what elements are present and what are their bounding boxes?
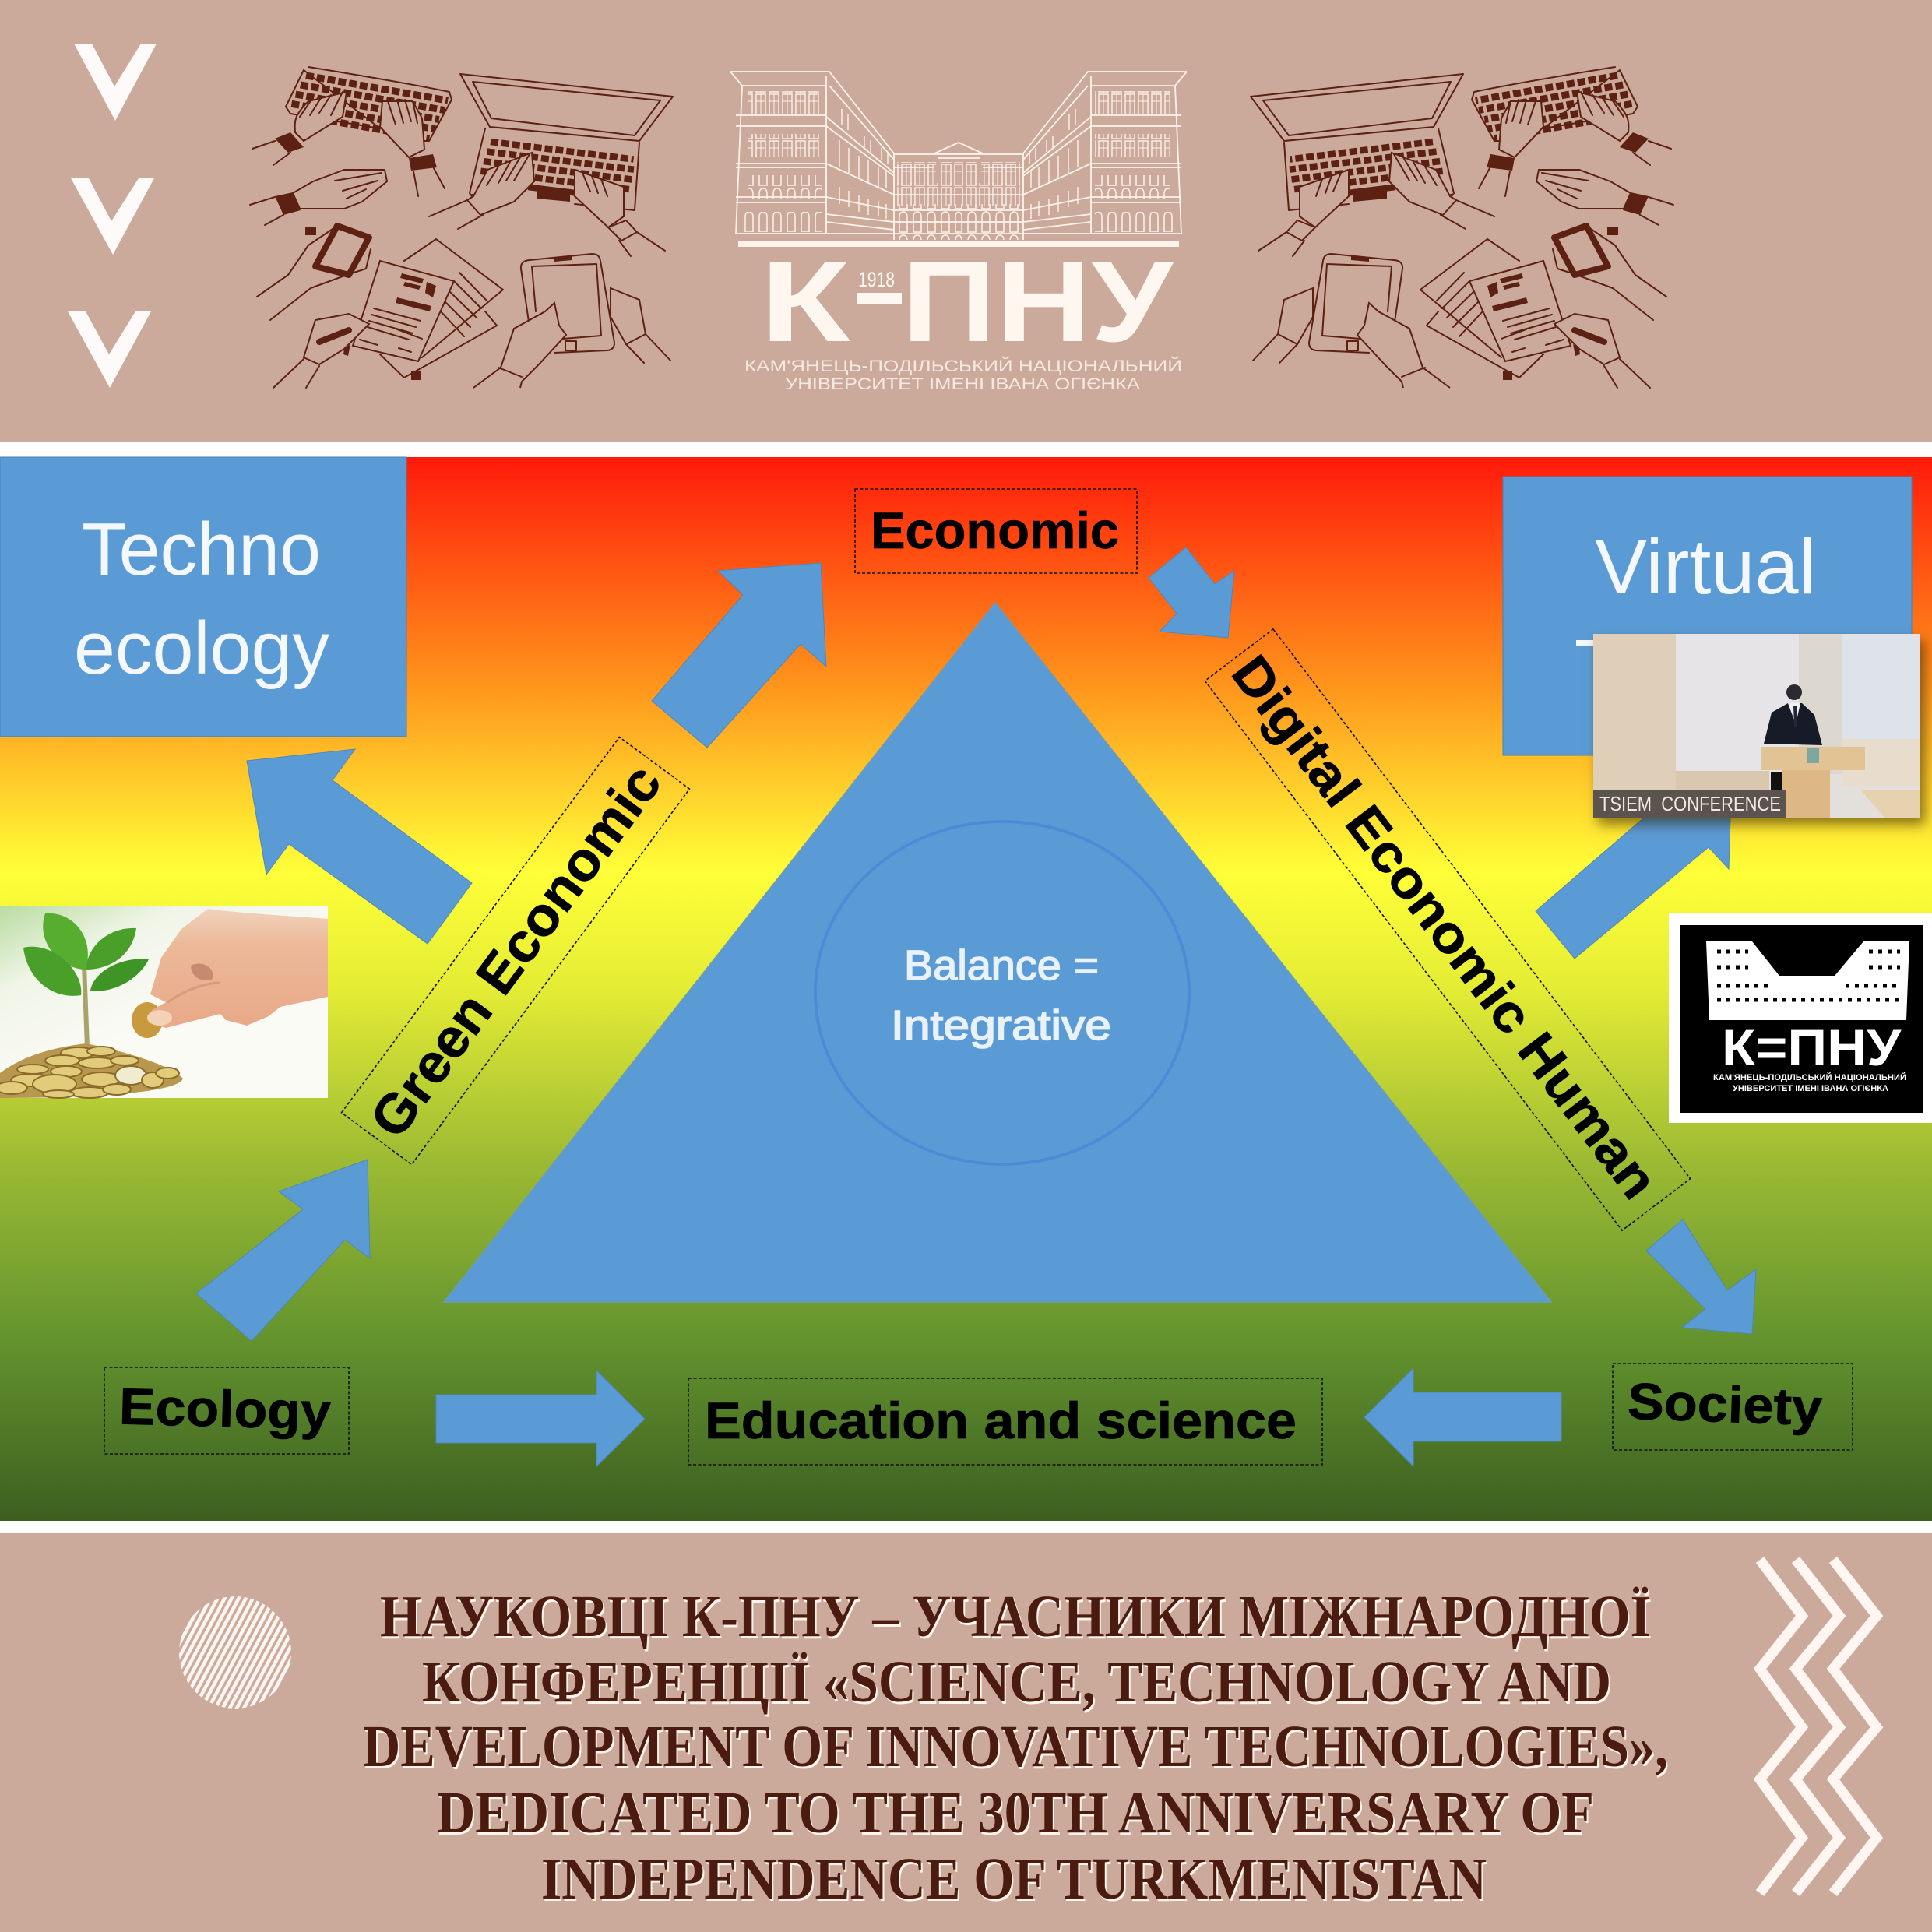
circle: integrative balance: Balance = (904, 942, 1099, 989)
label: Economic (855, 489, 1137, 573)
panel: Virtual box (1503, 477, 1912, 755)
label: Education and science: Education and science (705, 1392, 1297, 1449)
illustration: hands with devices, left (250, 67, 673, 388)
icon: white chevrons column (68, 44, 157, 388)
title: heading text: НАУКОВЦІ К-ПНУ – УЧАСНИКИ МІЖНАРОДНОЇ (380, 1584, 1651, 1649)
photo: plant and coins (0, 906, 328, 1098)
arrow: to Techno ecology (247, 749, 472, 944)
label: Education and science (688, 1378, 1322, 1465)
logo building (730, 72, 1187, 247)
panel: Virtual box: Virtual (1595, 523, 1816, 611)
arrow: Green Economic to Economic (652, 563, 826, 748)
circle: integrative balance: Integrative (891, 1002, 1111, 1049)
label: Economic: Economic (871, 501, 1119, 559)
label: Society: Society (1627, 1372, 1824, 1436)
logo caption (744, 357, 1182, 393)
label: Society (1613, 1364, 1853, 1450)
title: heading text (363, 1584, 1668, 1912)
icon: hatched circle (179, 1596, 291, 1709)
panel: Techno ecology box (0, 457, 406, 737)
label: Ecology: Ecology (118, 1377, 332, 1441)
title: heading text: INDEPENDENCE OF TURKMENISTAN (541, 1846, 1487, 1912)
arrow: Society to Education (1364, 1368, 1561, 1466)
arrow: Economic to Digital (1149, 547, 1234, 638)
panel: gradient diagram background (0, 457, 1932, 1521)
caption bar: TSIEM CONFERENCE (1599, 792, 1781, 815)
logo wordmark: 1918 (858, 268, 895, 291)
label: Ecology (104, 1367, 349, 1454)
panel: Techno ecology box: ecology (74, 607, 329, 690)
logo wordmark: ПНУ (902, 238, 1174, 366)
coin pile (0, 1043, 183, 1098)
illustration: hands with devices, right (1251, 67, 1673, 388)
logo wordmark: К (760, 238, 851, 366)
arrow: to Virtual box (1536, 794, 1730, 959)
stamp building (1706, 941, 1909, 1020)
logo caption: УНІВЕРСИТЕТ ІМЕНІ ІВАНА ОГІЄНКА (785, 375, 1140, 393)
title: heading text: DEDICATED TO THE 30TH ANNIVERSARY OF (437, 1780, 1594, 1846)
triangle: balance (444, 603, 1551, 1302)
plant leaves (23, 913, 149, 996)
podium (1761, 747, 1865, 818)
arrow: Ecology to Green Economic (196, 1160, 370, 1341)
logo wordmark (760, 238, 1174, 366)
icon: zigzag lines (1760, 1560, 1877, 1893)
top band (0, 0, 1932, 442)
photo: conference speaker (1593, 634, 1920, 818)
logo: black and white K-PNU stamp: КАМ'ЯНЕЦЬ-ПОДІЛЬСЬКИЙ НАЦІОНАЛЬНИЙ (1713, 1072, 1906, 1082)
logo: black and white K-PNU stamp (1669, 913, 1932, 1123)
speaker figure (1764, 684, 1822, 745)
label: Green Economic: Green Economic (358, 753, 673, 1149)
logo: black and white K-PNU stamp: УНІВЕРСИТЕТ ІМЕНІ ІВАНА ОГІЄНКА (1733, 1084, 1888, 1093)
logo: black and white K-PNU stamp: К=ПНУ (1722, 1019, 1902, 1076)
title: heading text: DEVELOPMENT OF INNOVATIVE TECHNOLOGIES», (363, 1714, 1668, 1779)
circle: integrative balance (815, 822, 1189, 1164)
arrow: Digital to Society (1646, 1219, 1756, 1334)
label: Digital Economic Human: Digital Economic Human (1220, 645, 1669, 1209)
hand with coin (132, 909, 328, 1038)
bottom band (0, 1533, 1932, 1932)
logo: K-PNU university (730, 72, 1187, 393)
arrow: Ecology to Education (436, 1371, 645, 1466)
plant stem (84, 966, 87, 1047)
logo caption: КАМ'ЯНЕЦЬ-ПОДІЛЬСЬКИЙ НАЦІОНАЛЬНИЙ (744, 357, 1182, 375)
panel: Techno ecology box: Techno (82, 508, 321, 591)
title: heading text: КОНФЕРЕНЦІЇ «SCIENCE, TECHNOLOGY AND (422, 1649, 1611, 1715)
